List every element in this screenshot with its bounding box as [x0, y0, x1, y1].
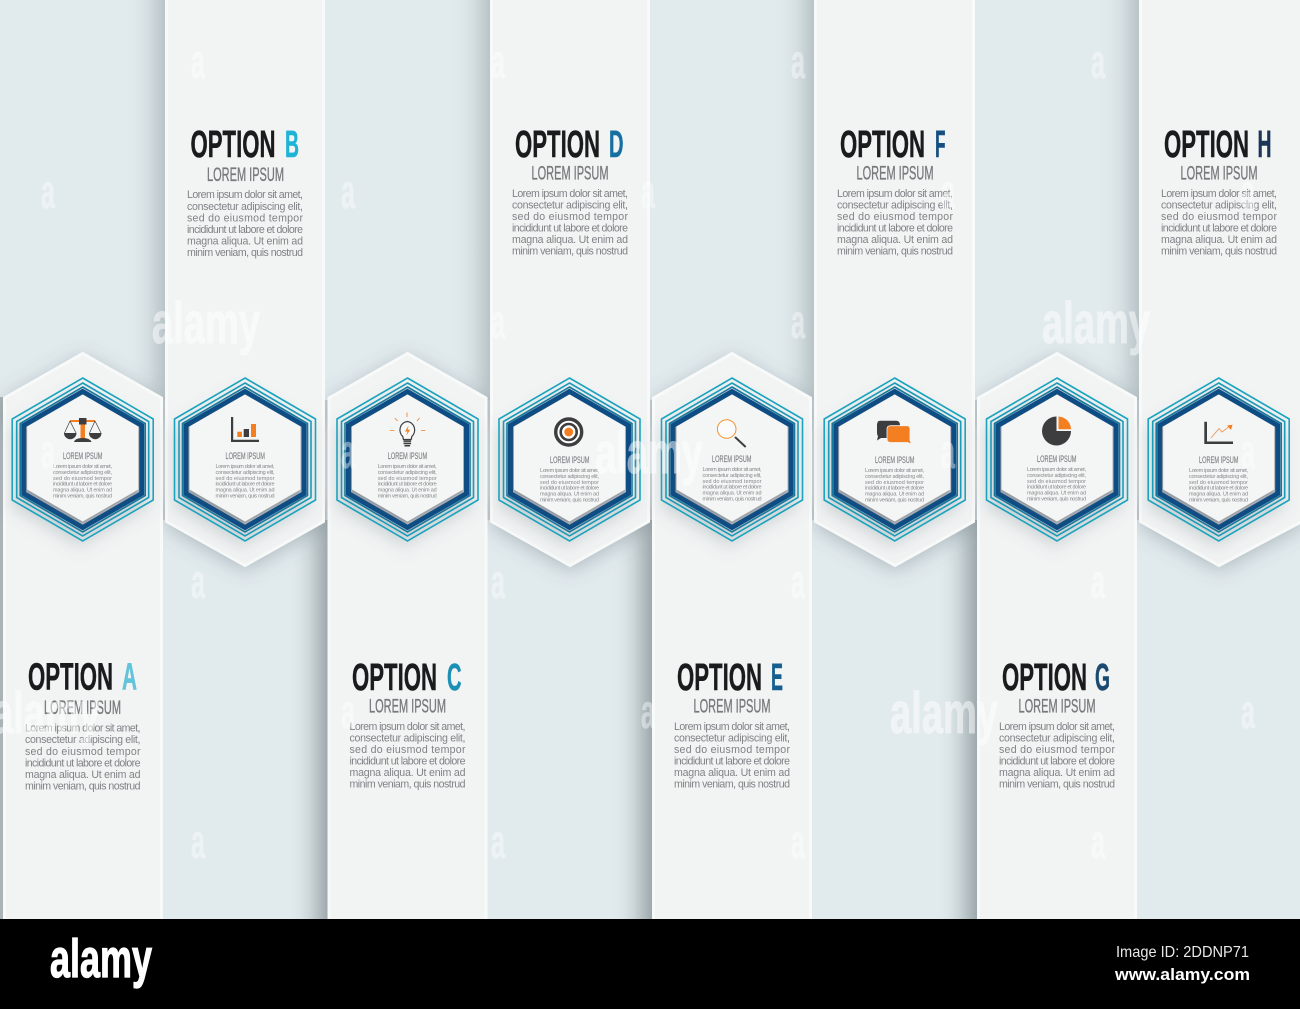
ring E — [662, 378, 802, 541]
option E text: E — [771, 657, 783, 699]
hexagon C text: sed do eiusmod tempor — [378, 476, 437, 482]
hexagon E text: incididunt ut labore et dolore — [702, 485, 762, 491]
watermarks: a — [191, 556, 205, 609]
hexagon A text — [53, 451, 112, 499]
hexagon G text: LOREM IPSUM — [1037, 454, 1076, 464]
description: sed do eiusmod tempor — [187, 212, 303, 224]
title: OPTION — [352, 657, 437, 699]
title: G — [1095, 657, 1110, 699]
watermarks: a — [1241, 426, 1255, 479]
hexagon G text: Lorem ipsum dolor sit amet, — [1027, 467, 1086, 473]
ring G — [986, 378, 1128, 541]
ring B — [174, 378, 316, 541]
description: consectetur adipiscing elit, — [512, 200, 628, 212]
description: magna aliqua. Ut enim ad — [350, 767, 466, 779]
description: minim veniam, quis nostrud — [674, 778, 790, 790]
hexagon E text: Lorem ipsum dolor sit amet, — [702, 467, 762, 473]
ring C — [337, 378, 478, 541]
hexagon H text: LOREM IPSUM — [1199, 455, 1238, 465]
description: consectetur adipiscing elit, — [25, 734, 140, 746]
icon: line chart — [1204, 422, 1233, 444]
hexagon D text: Lorem ipsum dolor sit amet, — [540, 468, 599, 474]
watermarks: a — [791, 36, 805, 89]
hexagon B text: sed do eiusmod tempor — [216, 476, 275, 482]
description: Lorem ipsum dolor sit amet, — [512, 188, 628, 200]
icon: chat bubbles — [877, 421, 912, 444]
hexagon B text: magna aliqua. Ut enim ad — [216, 488, 274, 494]
title: A — [122, 656, 137, 698]
description: sed do eiusmod tempor — [512, 211, 628, 223]
hexagon B text: incididunt ut labore et dolore — [216, 482, 274, 488]
title: OPTION — [28, 656, 113, 698]
option F text: F — [935, 124, 946, 166]
hexagon F text: Lorem ipsum dolor sit amet, — [865, 468, 924, 474]
icon: target — [556, 419, 582, 445]
hexagon C text: consectetur adipiscing elit, — [378, 470, 437, 476]
hexagon A text: consectetur adipiscing elit, — [53, 470, 112, 476]
description — [25, 722, 141, 792]
watermarks: a — [941, 426, 955, 479]
option G text — [999, 657, 1115, 790]
hexagon G text: magna aliqua. Ut enim ad — [1027, 490, 1086, 496]
watermarks: a — [1241, 686, 1255, 739]
hexagon C text: incididunt ut labore et dolore — [378, 482, 437, 488]
icon: bar chart — [231, 417, 259, 442]
hexagon D text — [540, 455, 599, 503]
watermarks: alamy — [1042, 291, 1150, 356]
description: sed do eiusmod tempor — [837, 211, 953, 223]
hexagon A text: sed do eiusmod tempor — [53, 476, 112, 482]
strip E — [654, 354, 810, 921]
watermarks: a — [341, 686, 355, 739]
hexagon D text: sed do eiusmod tempor — [540, 480, 599, 486]
icon: pie chart — [1042, 416, 1071, 446]
strip D — [492, 0, 648, 566]
description: incididunt ut labore et dolore — [837, 222, 953, 234]
icon: scales — [64, 418, 102, 442]
hexagon B text: LOREM IPSUM — [226, 451, 265, 461]
watermarks: alamy — [595, 421, 703, 486]
hexagon E text: minim veniam, quis nostrud — [702, 496, 762, 502]
description: incididunt ut labore et dolore — [25, 758, 141, 770]
hexagon H text — [1189, 455, 1248, 503]
description — [512, 188, 628, 258]
website: www.alamy.com — [1114, 965, 1250, 984]
description — [187, 189, 303, 259]
option A text — [25, 656, 141, 792]
title: OPTION — [190, 124, 276, 166]
option F text — [837, 124, 953, 258]
watermarks: a — [791, 816, 805, 869]
description: magna aliqua. Ut enim ad — [512, 234, 628, 246]
hexagon B text: Lorem ipsum dolor sit amet, — [216, 464, 275, 470]
hexagon E text: sed do eiusmod tempor — [702, 479, 762, 485]
hexagon H text: magna aliqua. Ut enim ad — [1189, 492, 1248, 498]
hexagon A text: magna aliqua. Ut enim ad — [53, 488, 112, 494]
hexagon F text: consectetur adipiscing elit, — [865, 474, 924, 480]
watermarks: a — [41, 426, 55, 479]
title: OPTION — [840, 124, 925, 166]
subtitle: LOREM IPSUM — [1018, 696, 1096, 718]
watermarks: a — [641, 686, 655, 739]
description: consectetur adipiscing elit, — [837, 200, 953, 212]
strip F — [816, 0, 974, 566]
description: Lorem ipsum dolor sit amet, — [350, 721, 466, 733]
hexagon F text: magna aliqua. Ut enim ad — [865, 492, 924, 498]
hexagon D text: incididunt ut labore et dolore — [540, 486, 599, 492]
option E text — [674, 657, 790, 790]
hexagon G text: minim veniam, quis nostrud — [1027, 496, 1086, 502]
watermarks: a — [491, 816, 505, 869]
watermarks: alamy — [152, 291, 260, 356]
ring F — [824, 378, 965, 541]
watermarks: a — [341, 426, 355, 479]
hexagon D text: minim veniam, quis nostrud — [540, 497, 599, 503]
description: consectetur adipiscing elit, — [999, 732, 1115, 744]
strip C — [329, 354, 486, 921]
hexagon G text: consectetur adipiscing elit, — [1027, 473, 1086, 479]
watermarks: a — [191, 36, 205, 89]
description: consectetur adipiscing elit, — [1161, 200, 1277, 212]
watermarks: a — [41, 166, 55, 219]
subtitle: LOREM IPSUM — [532, 164, 608, 184]
description: sed do eiusmod tempor — [1161, 211, 1277, 223]
strip A — [4, 354, 162, 921]
inner hexagons — [27, 394, 1274, 522]
subtitle: LOREM IPSUM — [369, 696, 446, 718]
description: Lorem ipsum dolor sit amet, — [25, 722, 140, 734]
description: magna aliqua. Ut enim ad — [999, 767, 1115, 779]
description: Lorem ipsum dolor sit amet, — [187, 189, 303, 201]
watermarks: a — [941, 166, 955, 219]
icon: light bulb — [390, 412, 426, 446]
option H text — [1161, 124, 1277, 258]
hexagon C text — [378, 451, 437, 499]
ring H — [1148, 378, 1289, 541]
hexagon E text: LOREM IPSUM — [712, 454, 752, 464]
hexagon F text: sed do eiusmod tempor — [865, 480, 924, 486]
description: incididunt ut labore et dolore — [1161, 222, 1277, 234]
hexagon A text: LOREM IPSUM — [63, 451, 102, 461]
description: Lorem ipsum dolor sit amet, — [674, 721, 790, 733]
description: incididunt ut labore et dolore — [187, 224, 303, 236]
image id: Image ID: 2DDNP71 — [1116, 944, 1249, 961]
watermarks: a — [1091, 816, 1105, 869]
watermarks: a — [341, 166, 355, 219]
hexagon C text: magna aliqua. Ut enim ad — [378, 488, 437, 494]
hexagon A text: Lorem ipsum dolor sit amet, — [53, 464, 112, 470]
title: OPTION — [515, 124, 600, 166]
hexagon F text: incididunt ut labore et dolore — [865, 486, 924, 492]
hexagon B text — [216, 451, 275, 499]
subtitle: LOREM IPSUM — [694, 696, 770, 718]
description: Lorem ipsum dolor sit amet, — [999, 721, 1115, 733]
hexagon F text: minim veniam, quis nostrud — [865, 497, 924, 503]
footer logo: alamy — [50, 929, 152, 989]
hexagon H text: consectetur adipiscing elit, — [1189, 474, 1248, 480]
description: minim veniam, quis nostrud — [1161, 246, 1277, 258]
hexagon H text: minim veniam, quis nostrud — [1189, 497, 1248, 503]
ring D — [499, 378, 640, 541]
description: sed do eiusmod tempor — [350, 744, 466, 756]
hexagon F text: LOREM IPSUM — [875, 455, 914, 465]
description: incididunt ut labore et dolore — [350, 756, 466, 768]
option D text — [512, 124, 628, 258]
description — [837, 188, 953, 258]
description: Lorem ipsum dolor sit amet, — [1161, 188, 1277, 200]
title: C — [447, 657, 462, 699]
description: incididunt ut labore et dolore — [512, 222, 628, 234]
description: magna aliqua. Ut enim ad — [187, 236, 303, 248]
icon: magnifier — [717, 420, 746, 447]
hexagon C text: Lorem ipsum dolor sit amet, — [378, 464, 437, 470]
description — [674, 721, 790, 790]
description: Lorem ipsum dolor sit amet, — [837, 188, 953, 200]
description — [1161, 188, 1277, 258]
description: magna aliqua. Ut enim ad — [1161, 234, 1277, 246]
description: minim veniam, quis nostrud — [999, 778, 1115, 790]
watermarks: a — [641, 166, 655, 219]
subtitle: LOREM IPSUM — [44, 698, 121, 719]
watermarks: a — [1241, 166, 1255, 219]
description: consectetur adipiscing elit, — [187, 201, 303, 213]
description: magna aliqua. Ut enim ad — [837, 234, 953, 246]
description: minim veniam, quis nostrud — [350, 778, 466, 790]
hexagon D text: LOREM IPSUM — [550, 455, 590, 465]
watermarks: a — [191, 816, 205, 869]
hexagon D text: magna aliqua. Ut enim ad — [540, 492, 599, 498]
watermarks: a — [791, 556, 805, 609]
title: B — [285, 124, 299, 166]
hexagon A text: minim veniam, quis nostrud — [53, 493, 112, 499]
watermarks: a — [491, 36, 505, 89]
hexagon E text: magna aliqua. Ut enim ad — [702, 490, 762, 496]
strip H — [1140, 0, 1300, 566]
gap shadows — [0, 0, 1140, 919]
description: consectetur adipiscing elit, — [350, 732, 466, 744]
watermarks: a — [791, 296, 805, 349]
description: minim veniam, quis nostrud — [512, 246, 628, 258]
hexagon B text: minim veniam, quis nostrud — [216, 493, 274, 499]
description: minim veniam, quis nostrud — [837, 246, 953, 258]
watermarks: a — [1091, 36, 1105, 89]
hexagon F text — [865, 455, 924, 503]
description: magna aliqua. Ut enim ad — [674, 767, 790, 779]
subtitle: LOREM IPSUM — [207, 165, 284, 186]
description: incididunt ut labore et dolore — [999, 756, 1115, 768]
strip G — [978, 354, 1136, 921]
hexagon G text: sed do eiusmod tempor — [1027, 479, 1086, 485]
hexagon G text: incididunt ut labore et dolore — [1027, 485, 1086, 491]
hexagon D text: consectetur adipiscing elit, — [540, 474, 599, 480]
footer bar — [0, 919, 1300, 1009]
hexagon G text — [1027, 454, 1086, 502]
hexagon H text: incididunt ut labore et dolore — [1189, 486, 1248, 492]
hexagon cap shadows — [4, 354, 1300, 566]
description: sed do eiusmod tempor — [999, 744, 1115, 756]
watermarks: alamy — [890, 681, 998, 746]
title: OPTION — [677, 657, 762, 699]
watermarks: a — [491, 296, 505, 349]
description: consectetur adipiscing elit, — [674, 732, 790, 744]
description: sed do eiusmod tempor — [25, 746, 141, 758]
description: minim veniam, quis nostrud — [187, 247, 303, 259]
title: H — [1258, 124, 1272, 166]
title: OPTION — [1002, 657, 1087, 699]
description: minim veniam, quis nostrud — [25, 780, 141, 792]
description: incididunt ut labore et dolore — [674, 756, 790, 768]
strip B — [166, 0, 324, 566]
description: sed do eiusmod tempor — [674, 744, 790, 756]
hexagon E text — [702, 454, 762, 502]
title: D — [609, 124, 624, 166]
hexagon C text: LOREM IPSUM — [388, 451, 427, 461]
watermarks — [0, 36, 1255, 869]
hexagon H text: sed do eiusmod tempor — [1189, 480, 1248, 486]
hexagon C text: minim veniam, quis nostrud — [378, 493, 437, 499]
hexagon E text: consectetur adipiscing elit, — [702, 473, 762, 479]
description — [999, 721, 1115, 790]
option C text — [350, 657, 466, 790]
option B text — [187, 124, 303, 259]
hexagon B text: consectetur adipiscing elit, — [216, 470, 275, 476]
watermarks: a — [1091, 556, 1105, 609]
watermarks: a — [491, 556, 505, 609]
hexagon A text: incididunt ut labore et dolore — [53, 482, 112, 488]
description: magna aliqua. Ut enim ad — [25, 769, 141, 781]
subtitle: LOREM IPSUM — [856, 164, 934, 184]
description — [350, 721, 466, 790]
ring A — [12, 378, 153, 541]
hexagon rings — [12, 378, 1289, 541]
hexagon H text: Lorem ipsum dolor sit amet, — [1189, 468, 1248, 474]
